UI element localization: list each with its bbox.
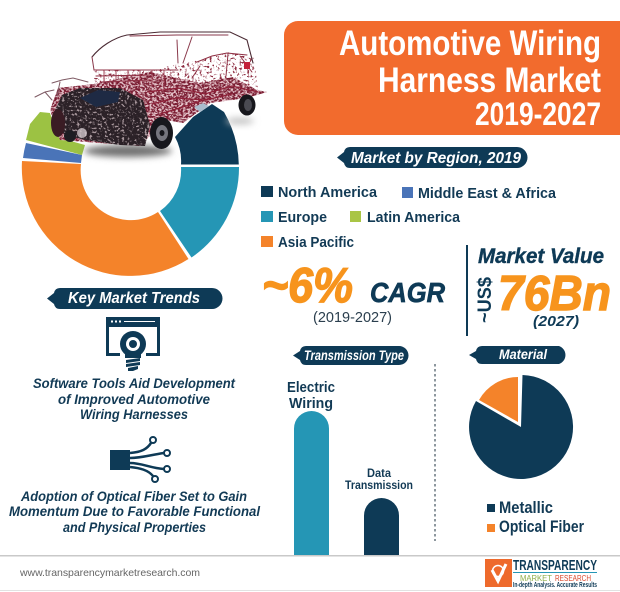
bar label: Electric Wiring: Wiring bbox=[289, 396, 333, 412]
bar chart: transmission type bbox=[287, 380, 413, 555]
logo subtitle: RESEARCH bbox=[555, 574, 591, 583]
wheels bbox=[51, 94, 256, 149]
logo subtitle bbox=[520, 574, 591, 583]
stat: CAGR: (2019-2027) bbox=[313, 309, 392, 326]
car shadow bbox=[84, 118, 254, 157]
legend item: North America: North America bbox=[278, 184, 378, 201]
stat: CAGR: ~6% bbox=[262, 259, 353, 313]
segment: North America bbox=[175, 104, 239, 164]
heading tag: transmission type: Transmission Type bbox=[304, 348, 404, 363]
icon: software window with gear bulb bbox=[106, 317, 160, 371]
segment: Asia Pacific bbox=[22, 161, 189, 276]
engine block bbox=[55, 88, 150, 146]
car wiring harness illustration bbox=[35, 32, 267, 157]
legend: material bbox=[487, 499, 584, 536]
stat: market value: (2027) bbox=[533, 313, 579, 330]
hood and glass details bbox=[77, 90, 209, 138]
title text bbox=[339, 24, 601, 132]
stat: market value: Market Value bbox=[478, 245, 604, 268]
segment: Europe bbox=[160, 167, 239, 258]
logo subtitle: MARKET bbox=[520, 574, 552, 583]
trend text: optical fiber: and Physical Properties bbox=[63, 519, 206, 535]
segment: Latin America bbox=[26, 112, 85, 155]
trend text: software tools bbox=[33, 375, 236, 422]
bar label: Data Transmission bbox=[345, 468, 413, 492]
legend item: Optical Fiber: Optical Fiber bbox=[499, 518, 584, 536]
stat: market value bbox=[475, 245, 611, 330]
logo mark bbox=[485, 559, 512, 587]
donut chart: market by region bbox=[22, 104, 239, 276]
trend text: software tools: Software Tools Aid Development bbox=[33, 375, 236, 391]
bar label: Data Transmission: Transmission bbox=[345, 480, 413, 492]
slice: Optical Fiber bbox=[479, 377, 518, 422]
icon: optical fiber cable bbox=[110, 437, 170, 482]
bar label: Data Transmission: Data bbox=[367, 468, 392, 480]
trend text: optical fiber: Momentum Due to Favorable Functional bbox=[9, 503, 261, 519]
legend item: Europe: Europe bbox=[278, 209, 327, 226]
dotted divider bbox=[434, 364, 436, 541]
legend item: Middle East and Africa: Middle East & Africa bbox=[418, 185, 557, 202]
heading tag: market by region: Market by Region, 2019 bbox=[351, 150, 521, 167]
stat divider bbox=[466, 245, 468, 336]
heading tag: transmission type bbox=[293, 346, 408, 365]
slice: Metallic bbox=[469, 375, 573, 479]
legend item: Asia Pacific: Asia Pacific bbox=[278, 234, 354, 251]
bar: Data Transmission bbox=[364, 498, 399, 555]
bar: Electric Wiring bbox=[294, 411, 329, 555]
stat: market value: ~US$ bbox=[475, 277, 496, 323]
legend item: Metallic: Metallic bbox=[499, 499, 553, 517]
pie chart: material bbox=[469, 375, 573, 479]
legend item: Latin America: Latin America bbox=[367, 209, 461, 226]
footer rules bbox=[0, 555, 620, 591]
dense wire mass bbox=[50, 72, 267, 146]
trend text: software tools: of Improved Automotive bbox=[58, 391, 210, 407]
trend text: software tools: Wiring Harnesses bbox=[80, 406, 188, 422]
trend text: optical fiber bbox=[9, 488, 261, 535]
bar label: Electric Wiring: Electric bbox=[287, 380, 335, 396]
footer website: www.transparencymarketresearch.com bbox=[19, 567, 200, 579]
heading tag: material bbox=[469, 346, 565, 364]
heading tag: key market trends: Key Market Trends bbox=[68, 290, 200, 307]
heading tag: key market trends bbox=[47, 288, 223, 309]
bright red connector bbox=[244, 62, 250, 69]
stat: market value: 76Bn bbox=[498, 267, 611, 321]
title banner bbox=[284, 21, 620, 135]
trend text: optical fiber: Adoption of Optical Fiber Set to Gain bbox=[20, 488, 247, 504]
heading tag: material: Material bbox=[499, 347, 547, 362]
car frame wires bbox=[35, 32, 258, 114]
stat: CAGR: CAGR bbox=[370, 277, 446, 308]
legend: regions bbox=[261, 184, 557, 251]
bar label: Electric Wiring bbox=[287, 380, 335, 412]
sparse wires in cabin bbox=[94, 52, 258, 90]
logo: Transparency Market Research bbox=[485, 557, 597, 589]
segment: Middle East and Africa bbox=[23, 143, 82, 163]
stat: CAGR bbox=[262, 259, 446, 326]
